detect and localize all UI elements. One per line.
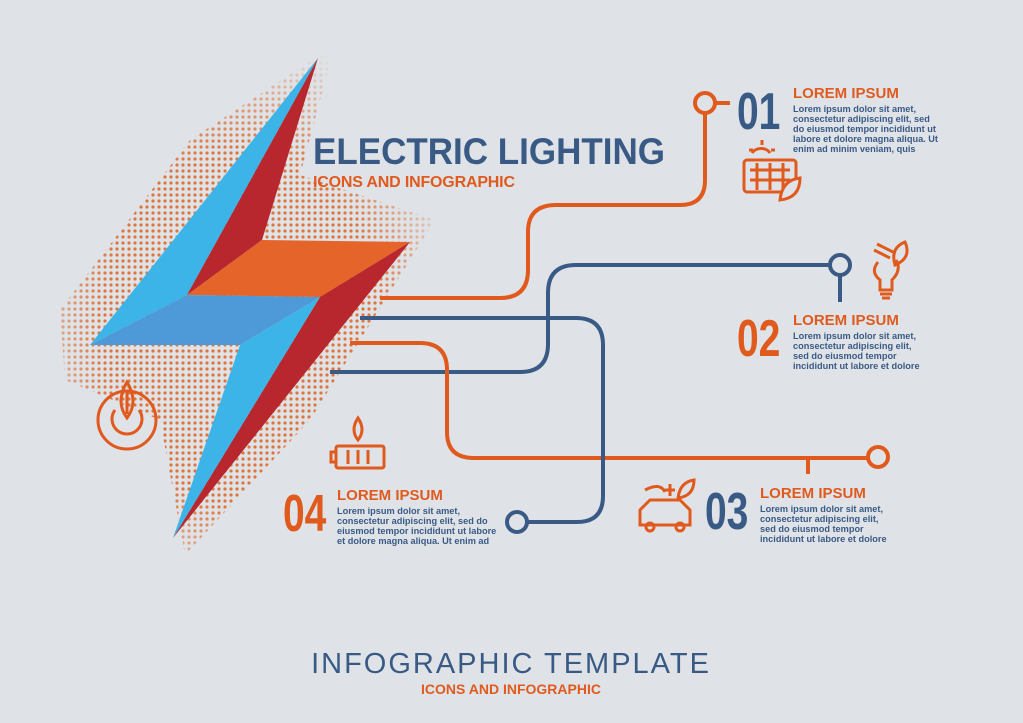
icon: solar panel — [744, 140, 800, 200]
footer title — [311, 648, 711, 697]
block 02: Lorem ipsum dolor sit amet, — [793, 331, 916, 341]
block 04: 04 — [283, 483, 327, 542]
icon: electric car — [640, 480, 694, 531]
footer title: INFOGRAPHIC TEMPLATE — [311, 648, 711, 680]
halftone background — [60, 45, 435, 555]
block 03: LOREM IPSUM — [760, 485, 866, 502]
block 02: LOREM IPSUM — [793, 312, 899, 329]
title: ICONS AND INFOGRAPHIC — [313, 174, 515, 191]
block 02: sed do eiusmod tempor — [793, 351, 897, 361]
title — [313, 131, 665, 191]
block 04: consectetur adipiscing elit, sed do — [337, 516, 488, 526]
block 04: Lorem ipsum dolor sit amet, — [337, 506, 460, 516]
block 03: Lorem ipsum dolor sit amet, — [760, 504, 883, 514]
icon: battery — [331, 418, 384, 468]
block 01: Lorem ipsum dolor sit amet, — [793, 104, 916, 114]
block 04: eiusmod tempor incididunt ut labore — [337, 526, 496, 536]
title: ELECTRIC LIGHTING — [313, 131, 665, 172]
connector lines — [330, 103, 868, 522]
block 01: LOREM IPSUM — [793, 85, 899, 102]
footer title: ICONS AND INFOGRAPHIC — [421, 681, 601, 697]
block 02: consectetur adipiscing elit, — [793, 341, 911, 351]
icon: power leaf — [98, 382, 156, 449]
block 01: enim ad minim veniam, quis — [793, 144, 916, 154]
block 01 — [737, 81, 938, 154]
block 03: consectetur adipiscing elit, — [760, 514, 878, 524]
icon: bulb — [874, 242, 907, 298]
block 01: labore et dolore magna aliqua. Ut — [793, 134, 938, 144]
block 03 — [705, 481, 887, 544]
block 04: LOREM IPSUM — [337, 487, 443, 504]
block 01: do eiusmod tempor incididunt ut — [793, 124, 936, 134]
block 01: 01 — [737, 81, 780, 140]
block 02: incididunt ut labore et dolore — [793, 361, 920, 371]
block 03: 03 — [705, 481, 748, 540]
block 04: et dolore magna aliqua. Ut enim ad — [337, 536, 489, 546]
block 02: 02 — [737, 308, 780, 367]
block 01: consectetur adipiscing elit, sed — [793, 114, 930, 124]
block 04 — [283, 483, 496, 546]
node circles — [507, 93, 888, 532]
block 03: sed do eiusmod tempor — [760, 524, 864, 534]
block 03: incididunt ut labore et dolore — [760, 534, 887, 544]
block 02 — [737, 308, 920, 371]
lightning bolt — [90, 58, 410, 538]
